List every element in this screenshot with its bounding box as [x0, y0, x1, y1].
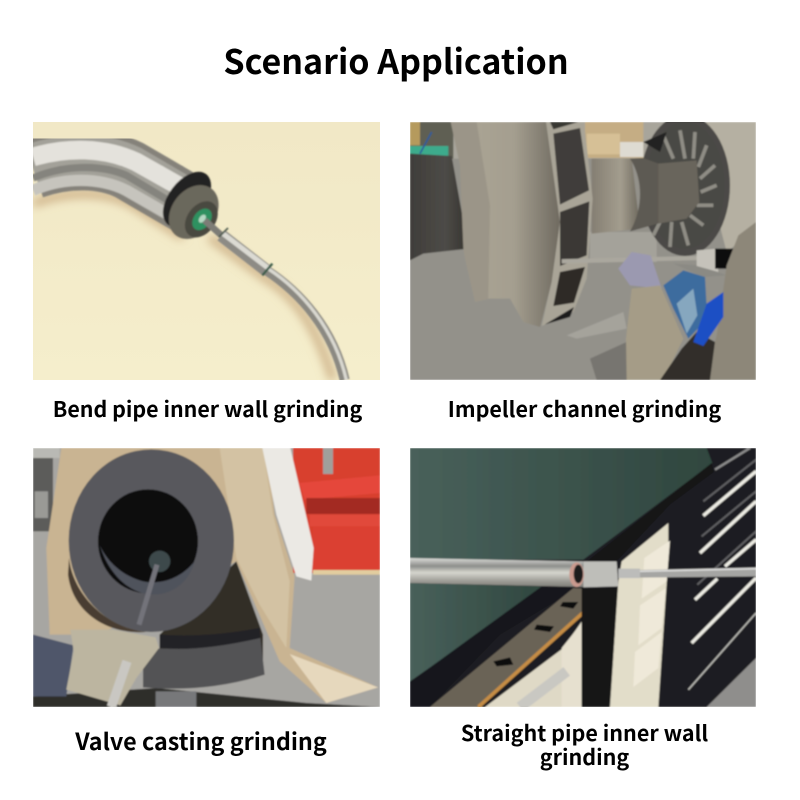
photo: impeller channel grinding: [410, 122, 756, 380]
caption: valve casting: Valve casting grinding: [75, 723, 327, 757]
caption: impeller: Impeller channel grinding: [448, 393, 721, 424]
caption: straight pipe: [461, 717, 708, 772]
caption: bend pipe: Bend pipe inner wall grinding: [53, 393, 362, 424]
caption: straight pipe: grinding: [540, 741, 629, 772]
title: Scenario Application: [223, 35, 569, 84]
photo: valve casting grinding: [33, 448, 380, 707]
photo: bend pipe inner wall grinding: [33, 122, 380, 380]
photo: straight pipe inner wall grinding: [410, 448, 756, 707]
caption: straight pipe: Straight pipe inner wall: [461, 717, 708, 748]
